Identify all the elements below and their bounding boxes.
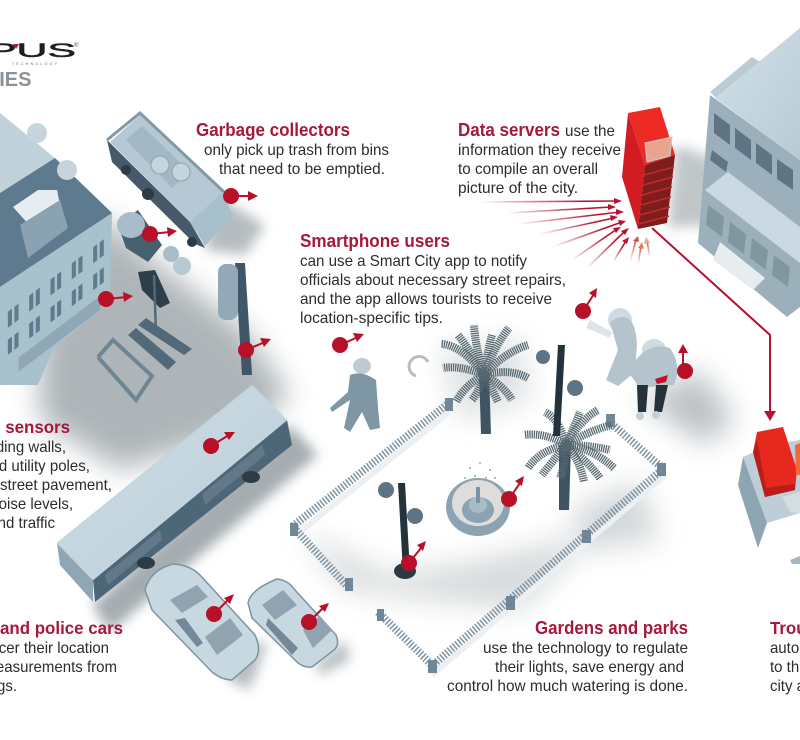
- fence sections: [296, 412, 665, 675]
- illustration: historic building: [0, 113, 112, 385]
- text: gardens and parks: Gardens and parks: [535, 618, 688, 638]
- text: smartphone users: [300, 231, 566, 327]
- soft ground shadows: [40, 145, 735, 690]
- signal head: [218, 264, 238, 320]
- upper windows: [710, 113, 793, 190]
- body: [330, 373, 380, 432]
- marker: walking person: [332, 333, 364, 353]
- car side window: [175, 618, 203, 647]
- illustration: street lamp two: [378, 482, 423, 579]
- top face: [628, 107, 675, 165]
- illustration: fountain: [446, 462, 510, 536]
- legs: [637, 385, 648, 412]
- sign plate: [138, 270, 170, 308]
- truck bed: [110, 115, 222, 222]
- sign pole: [154, 275, 156, 335]
- illustration: palm tree two: [524, 410, 614, 510]
- illustration: bus: [57, 386, 292, 602]
- lamp globes: [536, 350, 550, 364]
- server stripes: [639, 167, 674, 224]
- illustration: palm tree one: [441, 325, 528, 434]
- building roof top: [0, 113, 55, 193]
- building windows: [8, 239, 104, 380]
- text: data servers: use the: [565, 123, 615, 140]
- text: gardens and parks: use the technology to regulate: [483, 640, 688, 657]
- bus windows: [202, 445, 265, 505]
- illustration: park fence: [290, 398, 666, 675]
- illustration: trouble desk and server: [738, 427, 800, 564]
- fronds: [524, 410, 614, 482]
- bus wheels: [137, 557, 155, 569]
- small bins: [163, 246, 179, 262]
- logo: [0, 41, 79, 66]
- head: [353, 358, 371, 374]
- text: gardens and parks: their lights, save energy and: [495, 659, 684, 676]
- data rays: [480, 198, 650, 268]
- ray arrows: [480, 201, 650, 268]
- text: gardens and parks: [447, 618, 688, 695]
- red sensor markers: [98, 188, 693, 630]
- lamp base: [394, 563, 416, 579]
- wall: [698, 95, 800, 317]
- pole: [398, 483, 410, 572]
- text: sensors: street pavement,: [0, 477, 112, 494]
- chair: [790, 556, 800, 564]
- desk side: [738, 457, 767, 548]
- connector line to trouble center: [652, 228, 776, 421]
- truck cab: [190, 192, 233, 246]
- logo red accent: [13, 44, 19, 49]
- fountain basin: [446, 478, 510, 536]
- illustration: street lamp one: [536, 345, 583, 436]
- logo registered mark: ®: [74, 42, 79, 49]
- trunk: [479, 372, 491, 434]
- head: [608, 308, 632, 332]
- illustration: garbage truck: [107, 113, 233, 248]
- text: trouble reports: auto: [770, 640, 799, 657]
- text: taxis and police cars: cer their location: [0, 640, 109, 657]
- car rear window: [303, 616, 332, 648]
- marker: taxi: [206, 594, 234, 622]
- text: smartphone users: and the app allows tourists to receive: [300, 291, 552, 308]
- bus roof: [58, 386, 286, 579]
- truck containers: [151, 156, 190, 181]
- car body: [248, 579, 338, 667]
- truck side: [107, 140, 205, 248]
- striped front face: [638, 155, 675, 229]
- building walls: [0, 213, 112, 385]
- truck wheels: [121, 165, 197, 247]
- car body: [145, 564, 258, 680]
- car side window: [266, 618, 298, 655]
- text: garbage collectors: only pick up trash from bins: [204, 142, 389, 159]
- fountain tiers: [462, 497, 494, 523]
- barrel: [118, 210, 162, 262]
- keyboard paper: [782, 492, 800, 513]
- car windscreen: [262, 590, 297, 620]
- marker: fountain: [501, 476, 524, 507]
- marker: lamp: [401, 541, 426, 571]
- illustration: person with phone standing: [586, 308, 637, 386]
- car windscreen: [170, 585, 208, 613]
- illustration: small pool ring: [409, 356, 428, 376]
- marker: leaning person: [677, 344, 693, 379]
- text: data servers: [458, 120, 621, 197]
- marker: traffic light: [238, 338, 271, 358]
- illustration: police car: [248, 579, 338, 667]
- bus front: [57, 543, 93, 602]
- illustration: walking person: [330, 358, 380, 432]
- fence posts: [290, 398, 666, 673]
- ray arrowheads: [608, 198, 650, 249]
- wing roof: [705, 172, 800, 263]
- lamp globes: [378, 482, 394, 498]
- awning: [713, 242, 765, 290]
- text: garbage collectors: [196, 120, 389, 178]
- illustration: taxi car: [145, 564, 258, 680]
- text: sensors: d utility poles,: [0, 458, 90, 475]
- illustration: right office building: [698, 28, 800, 317]
- text: smartphone users: Smartphone users: [300, 231, 450, 251]
- logo tagline: TECHNOLOGY: [12, 62, 59, 66]
- shoes: [636, 412, 644, 420]
- illustration: road sign and barrier: [98, 270, 192, 400]
- text: smartphone users: location-specific tips.: [300, 310, 443, 327]
- text: sensors: [0, 417, 112, 532]
- illustration: person with phone leaning: [628, 339, 677, 420]
- truck bed panel: [126, 126, 190, 188]
- marker: building: [98, 291, 133, 307]
- wing windows: [706, 205, 790, 287]
- text: smartphone users: can use a Smart City app to notify: [300, 253, 527, 270]
- body: [628, 346, 677, 388]
- bus side: [93, 420, 292, 602]
- chimney domes: [27, 123, 77, 180]
- left face: [622, 113, 645, 229]
- text: taxis and police cars: and police cars: [0, 618, 123, 638]
- illustration: trash bins: [117, 210, 191, 275]
- head: [642, 339, 666, 361]
- desk top: [743, 440, 800, 523]
- car rear window: [205, 618, 243, 655]
- text: trouble reports: [770, 618, 800, 695]
- marker: truck: [223, 188, 258, 204]
- marker: bus: [203, 432, 235, 454]
- text: garbage collectors: that need to be emptied.: [219, 161, 385, 178]
- text: data servers: to compile an overall: [458, 161, 598, 178]
- text: data servers: Data servers: [458, 120, 560, 140]
- text: data servers: information they receive: [458, 142, 621, 159]
- red server shaded side: [753, 440, 795, 497]
- second red unit: [795, 443, 800, 475]
- fronds: [441, 325, 528, 402]
- illustration: data server: [622, 107, 675, 229]
- text: sensors: oise levels,: [0, 496, 73, 513]
- body: [606, 317, 637, 386]
- server screen: [645, 137, 672, 162]
- text: smartphone users: officials about necessary street repairs,: [300, 272, 566, 289]
- building mansard roof: [0, 158, 112, 287]
- text: taxis and police cars: [0, 618, 123, 695]
- illustration: traffic light: [218, 263, 252, 375]
- roof lip: [710, 57, 760, 98]
- truck bed rail: [107, 113, 224, 192]
- sign base: [138, 318, 192, 355]
- text: data servers: picture of the city.: [458, 180, 578, 197]
- marker: police car: [301, 603, 329, 630]
- phone: [655, 375, 668, 384]
- barrier: [98, 340, 152, 400]
- marker: barrel: [142, 226, 177, 242]
- trunk: [559, 445, 571, 510]
- pole: [553, 345, 565, 436]
- text: garbage collectors: Garbage collectors: [196, 120, 350, 140]
- text: gardens and parks: control how much watering is done.: [447, 678, 688, 695]
- pole: [235, 263, 252, 375]
- text: trouble reports: to th: [770, 659, 799, 676]
- arm and phone: [586, 320, 612, 338]
- red server unit: [753, 427, 797, 497]
- water spray: [464, 462, 496, 479]
- roof: [715, 28, 800, 160]
- dormer window: [13, 190, 68, 258]
- marker: standing person: [575, 288, 597, 319]
